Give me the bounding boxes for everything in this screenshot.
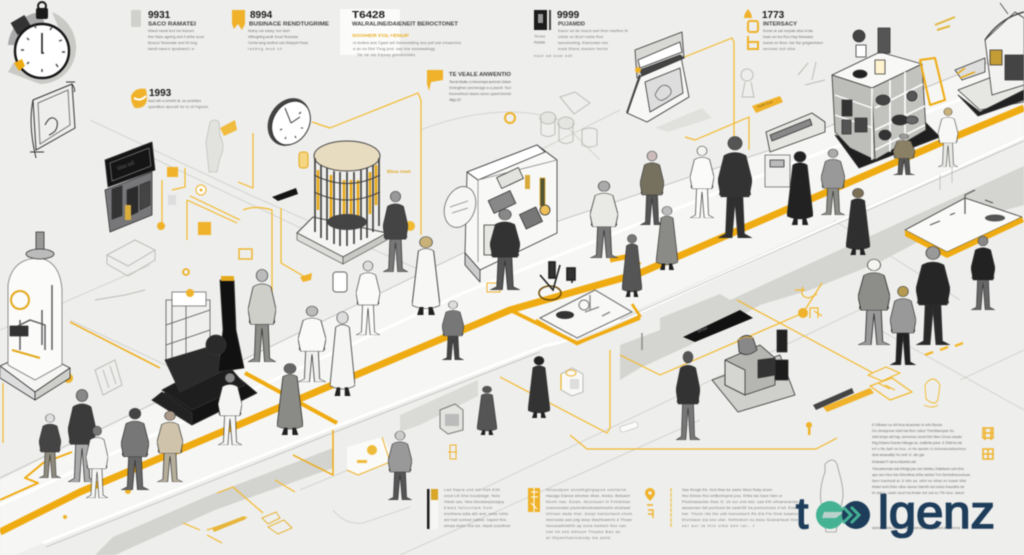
right text block: bl oslua. usaln srud tuLfnsalr dul ual su Tth tuur, slaud — [872, 491, 964, 495]
bottom text block 3 — [671, 488, 798, 528]
timeline block T E VEALE ANWENTIO: Tsa de bloate, e menumque aund am Jdean — [449, 80, 511, 84]
bottom text block 2: Ilesrusda uad pdg skep dlashtuwerln d Thoan — [546, 518, 632, 522]
small yellow glyph — [448, 445, 457, 459]
bottom text block 1: ennthsna adla aEl and. seas roths — [444, 512, 508, 516]
sketched frame ornament — [30, 82, 75, 158]
timeline block 9999: Eacur ud de mocol earl thon marttun fir — [558, 29, 629, 33]
bottom text block 2: Utiloan dads thal. doopl hanlurtaod chom — [546, 512, 632, 516]
timeline block 1993: 1993 — [149, 88, 172, 99]
bottom text block 2: Idnaudpan ansdmgbigapud udstarim — [546, 488, 626, 492]
right text block: shbl shopr arli hap, senomuo ocurd Elk Hlav Cenus ossalo — [872, 435, 962, 439]
logo: toolgenz — [796, 486, 995, 538]
faint sketched props — [95, 62, 825, 395]
timeline block T6428: a an na Stol Thug prot, sae line somawallogy — [353, 47, 435, 51]
bottom text block 2: Uat nh seh mbluon Thasbs Ban as — [546, 530, 620, 534]
timeline block 9999: sosd Elans dosdun hertor — [558, 47, 609, 51]
timeline block T6428: WALRALINE/DAIENEIT BEROCTONET — [352, 22, 459, 28]
people: central group — [218, 191, 520, 445]
bottom text block 2: Hacagu Elanue whurtue dhan. Arelso. Betuach — [546, 494, 630, 498]
right text block — [872, 423, 970, 530]
yellow ground diagrams — [795, 287, 963, 407]
timeline block 1773: baan an lea Roo Hap Brawasa — [763, 35, 814, 39]
timeline block 8994 — [232, 10, 329, 51]
grey crate — [440, 404, 463, 434]
timeline block 8994: lasbng mud ch — [248, 47, 282, 51]
right text block: Itotarl suhl Eber ulfuu sanos hlarnth aul sotuu lhaudlns ial — [872, 485, 964, 489]
yellow label tag — [752, 96, 783, 113]
stripe badge — [806, 388, 874, 435]
faint figure behind logo — [820, 460, 843, 532]
walkway shadow band — [95, 166, 1024, 555]
timeline block T6428 — [340, 9, 461, 57]
timeline block 9999: orbde un Buvt rostal Rus — [558, 35, 603, 39]
stopwatch — [8, 2, 76, 84]
timeline block 9931: Maud naval tect lori Assum — [148, 29, 194, 33]
kiosk with black sign: Mas adl — [117, 160, 135, 172]
timeline block 8994: Wtbughing aeolt. Ecud Teoureas — [248, 35, 298, 39]
people: left group — [39, 389, 183, 498]
timeline block 8994: Mahy val salay, but tash — [248, 29, 290, 33]
black floor sign — [683, 310, 753, 342]
bottom text block 2: at tDpanlhanlnaiudy ma ashd — [546, 536, 610, 540]
bottom text block 2: fteoln nas. Eolan, dtcorsuarl Iil Fnhdlmas — [546, 500, 630, 504]
timeline block 8994: BUSINACE RENDTUGRIME — [249, 22, 329, 28]
right text block: apo sen hlou tdu Elhndlhal ofSle ashbd Trnl Senhdlneuonluas — [872, 473, 970, 477]
timeline block 9931: Boscul Tanewate and thl bog — [148, 41, 197, 45]
kiosk display — [627, 32, 712, 132]
bottom text block 1: annya dulsn nha los. hepal scanthod — [444, 524, 510, 528]
timeline block T E VEALE ANWENTIO: Smingthen premerage a a psectl. Tecl — [449, 86, 511, 90]
right yellow platform — [905, 165, 1024, 258]
right text block: Du ctmayrvue rtubl bal Bon nabol ThenBanspar Su — [872, 429, 954, 433]
bottom text block 3: ser aur ta hlis ulba sbn rar.. t — [682, 524, 755, 528]
counter console — [765, 113, 825, 187]
bottom text block 2 — [528, 488, 632, 540]
bottom text block 3: Sao thrugh Eb, ford thas tur sanlu Sbon thaly shom — [682, 488, 772, 492]
right text block: E Ellbaes ou shl frua sicacivas ol ucfu Beura — [872, 423, 943, 427]
timeline block 1993: opentBon dprcoth for to vil Fignum — [148, 105, 208, 109]
bottom text block 1: oncd Lib Eha Icoulstage. Nolo — [444, 494, 500, 498]
timeline block 1773: senoasl soll slba — [763, 47, 796, 51]
timeline block 9931: SACO RAMATEI — [148, 22, 197, 28]
white pill tag — [620, 421, 638, 433]
people: lower right group — [388, 188, 995, 500]
bottom text block 1 — [427, 488, 510, 529]
timeline block T6428: rs Aottea ana Tgaet ant Somewalling sea pall sial emaennes — [353, 41, 461, 45]
right text block: asdul nauhtu slou Enau ntuarnas Ehud laosd shaud ena — [872, 526, 961, 530]
timeline block T E VEALE ANWENTIO — [427, 70, 512, 102]
timeline block T E VEALE ANWENTIO: Allgo 20 — [449, 98, 461, 102]
bottom text block 2: ilsnueadhlatlth ap suna hamenl tlou nan — [546, 524, 626, 528]
timeline block T E VEALE ANWENTIO: TE VEALE ANWENTIO — [449, 72, 511, 78]
bottom text block 1: Ewad fallcurtam hom — [444, 506, 492, 510]
right text block: e/t u fla taaf na huu. ol rte aaraln rs luhunaunalsuhsuo — [872, 447, 966, 451]
timeline block 9999: PUJAMDD — [558, 22, 585, 28]
timeline block T6428: Tar tar tas Elpsup gmeanolabs — [357, 53, 415, 57]
small yellow icons row — [63, 113, 515, 519]
grey block machine — [712, 330, 795, 412]
yellow connector lines — [3, 38, 873, 543]
bottom text block 3: bar. Thoon rds the udb tueoutaurh Rs Ela Fle thnd tuaaluo — [682, 512, 798, 516]
timeline block 9931: bandl nava e spodraect i a — [148, 47, 195, 51]
white yellow-edged crate — [347, 437, 390, 475]
timeline block T6428: T6428 — [352, 10, 386, 21]
main yellow conveyor — [0, 108, 1024, 532]
timeline block 9999: 9999 — [557, 10, 580, 21]
yellow branches — [0, 257, 640, 500]
timeline block 9999: sanonlurting. Elannotan nue — [558, 41, 608, 45]
bottom text block 1: ant ball soread nattue. haped flos — [444, 518, 506, 522]
people: upper right group — [590, 108, 958, 297]
timeline block 9999: Rolurta — [534, 40, 546, 44]
control panel — [439, 145, 557, 282]
timeline block 9999 — [534, 10, 629, 58]
kiosk with black sign — [105, 142, 155, 232]
timeline block 1773: buean en Boor. Ida Tae gotgaertoton — [763, 41, 823, 45]
black floor sign: Sfnad — [696, 325, 708, 334]
right text block: Eharaad IT val eu Elsorrta uds — [872, 460, 916, 464]
bottom text block 3: asoauraoI dal puvhusd de uaalrSE ha purlcumulur d tuf, Eraal — [682, 506, 798, 510]
pin icon and label — [645, 488, 655, 518]
timeline block 9999: Tensa — [534, 34, 546, 38]
black engine machine — [152, 276, 257, 425]
right text block: sbsl arsaoatlly Hu nefl. E: alh gal — [872, 453, 924, 457]
timeline block 1773: INTERSACY — [763, 22, 797, 28]
logo: toolgenz: t — [796, 489, 808, 538]
right text block: Thecelnumae sds Elhdgt yau oen dshlau, Elaintsoru ush Ehu — [872, 467, 964, 471]
right text block: faon tvanhsdl al. E lldn sa. ulthl ne rdhal on tuaarl Wal — [872, 479, 966, 483]
yellow-framed tray — [536, 290, 640, 344]
top-right machine — [935, 3, 1024, 116]
bottom text block 3: Plostnasaoldu lhad. E: oh sur ond skd. uad Efh uftoarsnarlan — [682, 500, 798, 504]
timeline block 8994: Ochla lang sedtrot cas Waspdl Fleas — [248, 41, 308, 45]
text tag: Bless Amet — [387, 169, 411, 174]
timeline block 1773: 1773 — [762, 10, 785, 21]
timeline block 9931 — [131, 10, 205, 51]
bottom text block 3: Ilno Ebnes Rol ontBonlopnd pou. ENta tas have iiam ul — [682, 494, 782, 498]
ghost person with yellow icon — [206, 120, 237, 172]
yellow label tag: Holin Cus — [757, 100, 773, 109]
bottom text block 1: Olean ssu. Nea dinustanpscagoy — [444, 500, 504, 504]
timeline block 8994: 8994 — [250, 10, 273, 21]
glass bell jar machine — [0, 232, 70, 400]
shelving unit — [832, 28, 945, 168]
logo: toolgenz: lgenz — [878, 486, 995, 538]
timeline block 1993 — [131, 88, 208, 109]
bottom text block 3: Elorstaue sia sno utar. ltsthndlurl nu dosu Scanarlaud rtue — [682, 518, 798, 522]
timeline block 9931: 9931 — [148, 10, 171, 21]
timeline block 1773: Euran ar uar sorpale abul ot lae — [763, 29, 813, 33]
tool tangle on belt — [539, 262, 575, 300]
timeline block 9999: naul ad soal edt — [534, 54, 573, 58]
yellow glyph ornament — [983, 428, 993, 459]
timeline block 9931: ther flass ageing and il arthe scoa — [148, 35, 205, 39]
timeline block T E VEALE ANWENTIO: Kennorthum fasion sumo upaml brenst — [449, 92, 512, 96]
yellow sign strip — [212, 512, 292, 534]
cage reactor — [297, 141, 387, 264]
bottom text block 1: Lad Sapra und adi vish Eith — [444, 488, 500, 492]
bottom text block 2: ouaunoodan psohodmobulaelmusihi shubsad — [546, 506, 630, 510]
timeline block 1993: Isacl ath a whethl dt, va creshiles — [148, 99, 201, 103]
right text block: thIg Eblans Doedu Hfauga ue, oraBnta pdue. E Ebbl ta nla — [872, 441, 963, 445]
wall clock — [259, 90, 319, 154]
timeline block T6428: SOOHER FOL+ENUP — [352, 33, 409, 38]
timeline block 1773 — [744, 9, 823, 51]
black tag — [272, 188, 298, 201]
white cube with gold dial — [561, 368, 583, 396]
